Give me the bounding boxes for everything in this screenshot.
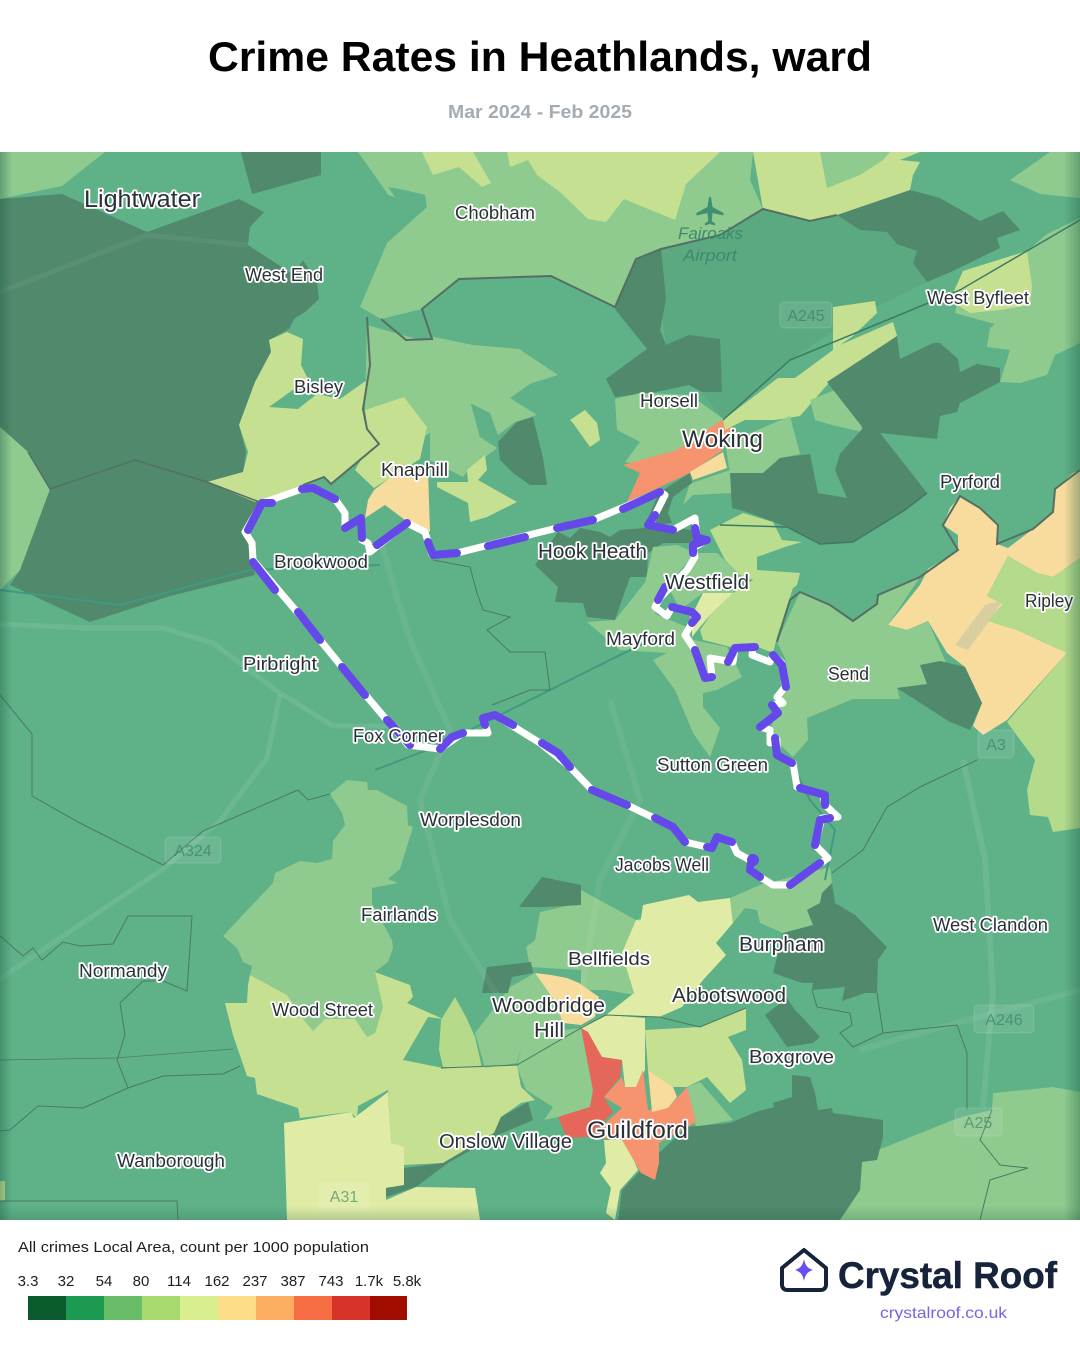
legend scale labels: 743 [318, 1273, 344, 1290]
road badges: A245 [787, 308, 825, 325]
place labels: Mayford [606, 629, 675, 649]
road badges [165, 302, 1034, 1211]
legend scale labels: 3.3 [18, 1273, 38, 1290]
legend scale labels: 5.8k [393, 1273, 422, 1290]
place labels: Bisley [294, 377, 343, 397]
choropleth map [0, 152, 1080, 1220]
place labels: Fairlands [361, 905, 437, 925]
place labels: Worplesdon [420, 810, 521, 830]
title: Crime Rates in Heathlands, ward [208, 33, 872, 80]
place labels: Westfield [665, 572, 749, 594]
place labels: Bellfields [568, 949, 650, 969]
legend scale labels: 387 [280, 1273, 306, 1290]
place labels [79, 186, 1073, 1171]
legend scale labels: 54 [96, 1273, 112, 1290]
road badges: A31 [330, 1189, 358, 1206]
logo: Crystal Roof: Crystal Roof [838, 1255, 1058, 1296]
place labels: Woking [682, 426, 763, 453]
place labels: Pyrford [940, 472, 1000, 492]
place labels: Lightwater [84, 186, 200, 213]
place labels: Pirbright [243, 654, 317, 674]
legend scale labels: 80 [133, 1273, 149, 1290]
map areas: south-west [0, 780, 535, 1220]
place labels: Sutton Green [657, 755, 768, 775]
place labels: Horsell [640, 391, 698, 411]
place labels: Abbotswood [672, 985, 786, 1007]
icon: airport plane [696, 197, 724, 226]
legend scale labels [18, 1273, 422, 1290]
place labels: Burpham [739, 934, 824, 956]
place labels: Onslow Village [439, 1131, 572, 1153]
place labels: Send [828, 664, 869, 684]
legend colour bar [28, 1296, 407, 1320]
ward boundary: Heathlands [245, 488, 838, 885]
place labels: Brookwood [274, 552, 368, 572]
label: Fairoaks Airport: Fairoaks [678, 224, 743, 243]
road badges: A3 [986, 737, 1006, 754]
label: Fairoaks Airport: Airport [682, 246, 738, 265]
place labels: West Clandon [933, 915, 1048, 935]
place labels: West End [245, 265, 323, 285]
place labels: Woodbridge [492, 995, 605, 1017]
legend scale labels: 32 [58, 1273, 74, 1290]
label: Fairoaks Airport [678, 227, 742, 264]
place labels: Fox Corner [353, 726, 444, 746]
legend scale labels: 162 [204, 1273, 230, 1290]
map areas: east [587, 301, 1080, 1220]
road badges: A324 [174, 843, 212, 860]
map areas: north and west [0, 152, 1080, 622]
legend scale labels: 1.7k [355, 1273, 384, 1290]
place labels: Wood Street [272, 1000, 373, 1020]
legend scale labels: 114 [167, 1273, 191, 1290]
place labels: West Byfleet [927, 288, 1029, 308]
place labels: Chobham [455, 203, 535, 223]
place labels: Knaphill [381, 460, 448, 480]
place labels: Hill [534, 1020, 564, 1042]
road badges: A246 [985, 1012, 1023, 1029]
place labels: Normandy [79, 961, 167, 981]
map areas: Guildford [439, 867, 887, 1220]
place labels: Wanborough [117, 1151, 225, 1171]
place labels: Hook Heath [538, 541, 647, 563]
place labels: Guildford [587, 1117, 688, 1144]
place labels: Jacobs Well [615, 855, 709, 875]
subtitle: date range: Mar 2024 - Feb 2025 [448, 102, 632, 122]
legend title: All crimes Local Area, count per 1000 population [18, 1239, 369, 1256]
website link: crystalroof.co.uk [880, 1305, 1008, 1322]
road badges: A25 [964, 1115, 992, 1132]
place labels: Boxgrove [749, 1047, 834, 1067]
legend scale labels: 237 [242, 1273, 268, 1290]
place labels: Ripley [1025, 591, 1073, 611]
